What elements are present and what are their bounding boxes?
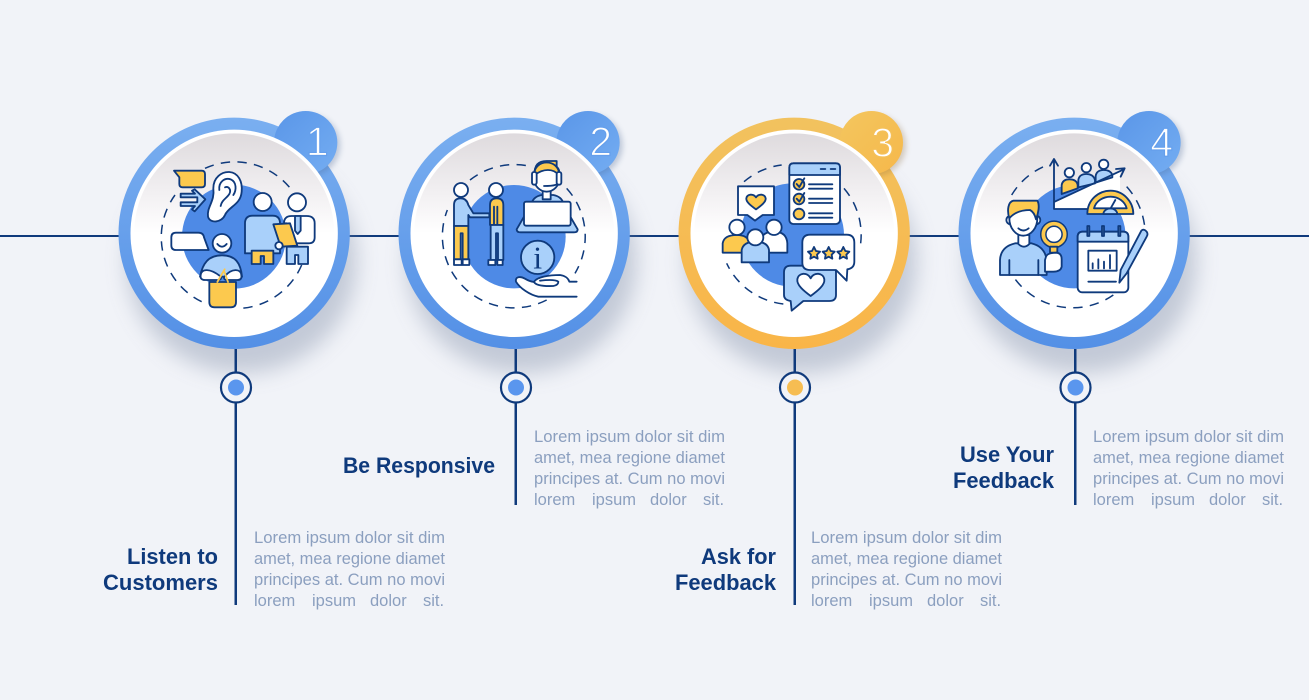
text block: step 4 description: lorem xyxy=(1093,491,1134,509)
icon: using feedback xyxy=(1000,159,1147,308)
text block: step 2 description: dolor xyxy=(650,491,687,509)
badge: number 4 xyxy=(1117,111,1181,174)
text block: step 1 description: principes at. Cum no movi xyxy=(254,571,445,589)
text block: step 2 description: principes at. Cum no movi xyxy=(534,470,725,488)
text block: step 4 description: ipsum xyxy=(1151,491,1195,509)
panel: step 2 connector xyxy=(501,349,531,505)
text block: step 4 description: Lorem ipsum dolor sit dim xyxy=(1093,428,1284,446)
text block: step 4 description: amet, mea regione diamet xyxy=(1093,449,1284,467)
badge: number 4: 4 xyxy=(1150,120,1173,166)
panel: step 2 circle xyxy=(398,111,637,373)
text block: step 1 description: lorem xyxy=(254,592,295,610)
text block: step 2 description: lorem xyxy=(534,491,575,509)
icon: asking for feedback xyxy=(723,163,861,311)
badge: number 1: 1 xyxy=(306,118,329,164)
text block: step 1 description: sit. xyxy=(423,592,444,610)
panel: step 3 connector xyxy=(780,349,810,605)
icon: responsive support: i xyxy=(533,239,542,275)
text block: step 1 description: dolor xyxy=(370,592,407,610)
text block: step 3 description: lorem xyxy=(811,592,852,610)
text block: step 2 description: sit. xyxy=(703,491,724,509)
panel: step 1 connector xyxy=(221,349,251,605)
text block: step 4 description: sit. xyxy=(1262,491,1283,509)
text block: step 4 description xyxy=(1093,428,1284,509)
panel: step 3 circle xyxy=(678,111,917,373)
text block: step 3 description xyxy=(811,529,1002,610)
text block: step 2 description: amet, mea regione diamet xyxy=(534,449,725,467)
text block: step 1 description: amet, mea regione diamet xyxy=(254,550,445,568)
badge: number 2: 2 xyxy=(589,118,612,164)
heading: Ask for Feedback: Ask for xyxy=(701,544,776,569)
panel: step 4 connector xyxy=(1060,349,1090,505)
text block: step 1 description: ipsum xyxy=(312,592,356,610)
heading: Ask for Feedback: Feedback xyxy=(675,570,777,595)
text block: step 2 description xyxy=(534,428,725,509)
heading: Use Your Feedback: Use Your xyxy=(960,442,1054,467)
heading: Listen to Customers: Listen to xyxy=(127,544,218,569)
text block: step 3 description: sit. xyxy=(980,592,1001,610)
heading: Be Responsive: Be Responsive xyxy=(343,453,495,478)
badge: number 2 xyxy=(556,111,620,174)
heading: Listen to Customers: Customers xyxy=(103,570,218,595)
text block: step 3 description: amet, mea regione diamet xyxy=(811,550,1002,568)
timeline horizontal line xyxy=(0,235,1309,237)
badge: number 3: 3 xyxy=(871,120,894,166)
text block: step 3 description: Lorem ipsum dolor sit dim xyxy=(811,529,1002,547)
heading: Use Your Feedback: Feedback xyxy=(953,468,1055,493)
text block: step 4 description: principes at. Cum no movi xyxy=(1093,470,1284,488)
icon: listening to customers xyxy=(161,162,315,308)
text block: step 1 description xyxy=(254,529,445,610)
icon: responsive support xyxy=(442,161,585,308)
panel: step 1 circle xyxy=(118,111,357,373)
panel: step 4 circle xyxy=(958,111,1197,373)
text block: step 4 description: dolor xyxy=(1209,491,1246,509)
text block: step 1 description: Lorem ipsum dolor sit dim xyxy=(254,529,445,547)
text block: step 2 description: Lorem ipsum dolor sit dim xyxy=(534,428,725,446)
badge: number 3 xyxy=(840,111,903,174)
text block: step 2 description: ipsum xyxy=(592,491,636,509)
text block: step 3 description: principes at. Cum no movi xyxy=(811,571,1002,589)
text block: step 3 description: dolor xyxy=(927,592,964,610)
text block: step 3 description: ipsum xyxy=(869,592,913,610)
badge: number 1 xyxy=(274,111,337,174)
